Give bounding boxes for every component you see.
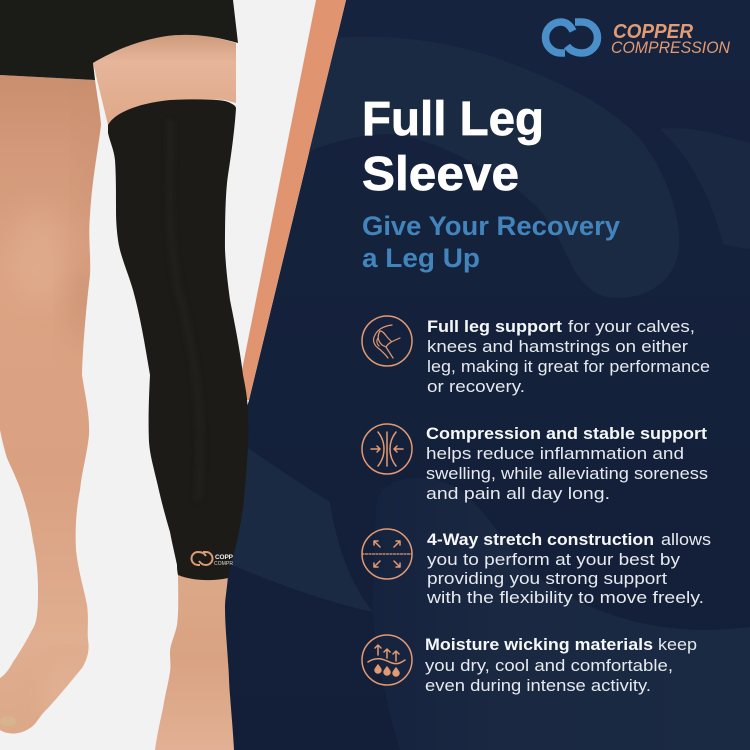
text: 4-way stretch: with the flexibility to move freely. <box>426 589 704 607</box>
swirl background band top <box>300 37 679 298</box>
text: 4-way stretch: allows <box>661 531 711 549</box>
text: moisture wicking <box>425 636 697 695</box>
navy panel <box>200 0 750 750</box>
sleeve seam highlight <box>170 120 200 500</box>
text: 4-way stretch: you to perform at your best by <box>427 551 681 569</box>
text: 4-way stretch: providing you strong support <box>427 570 667 588</box>
sleeve logo <box>192 552 234 565</box>
text: full leg support: leg, making it great for performance <box>427 358 710 376</box>
subtitle: a Leg Up <box>362 243 480 273</box>
text: full leg support <box>427 318 710 396</box>
left leg <box>0 70 110 740</box>
text: full leg support: or recovery. <box>427 378 525 396</box>
sleeve logo text: COPP <box>215 554 234 561</box>
title <box>362 93 544 201</box>
benefit: moisture wicking <box>362 635 697 695</box>
left toenail <box>0 716 16 726</box>
title: Sleeve <box>362 148 519 201</box>
subtitle: Give Your Recovery <box>362 211 620 241</box>
text: 4-way stretch <box>426 531 711 607</box>
text: full leg support: knees and hamstrings on either <box>427 338 689 356</box>
text: moisture wicking: Moisture wicking materials <box>425 636 653 654</box>
icon: knee <box>362 316 412 366</box>
benefit: full leg support <box>362 316 710 396</box>
logo mark <box>546 22 597 53</box>
icon: moisture wicking <box>362 635 412 685</box>
shorts <box>0 0 238 80</box>
swirl background shape lower right <box>440 532 750 750</box>
sleeve logo mark <box>192 552 212 565</box>
logo word compression: COMPRESSION <box>611 38 731 57</box>
swirl background shape upper right <box>660 128 750 249</box>
compression sleeve <box>108 99 248 580</box>
benefit: 4-way stretch <box>362 529 711 607</box>
text: full leg support: for your calves, <box>568 318 695 336</box>
icon: compression arrows <box>362 424 412 474</box>
benefit: compression <box>362 424 708 503</box>
logo word copper: COPPER <box>613 21 694 43</box>
text: compression <box>426 425 708 503</box>
right lower leg and foot <box>155 570 234 750</box>
subtitle <box>362 211 620 273</box>
text: 4-way stretch: 4-Way stretch construction <box>427 531 654 549</box>
text: compression: Compression and stable support <box>426 425 708 443</box>
text: compression: and pain all day long. <box>426 485 610 503</box>
text: moisture wicking: keep <box>658 636 697 654</box>
right thigh <box>93 35 236 125</box>
text: compression: swelling, while alleviating soreness <box>426 465 708 483</box>
sleeve logo subtext: COMPR <box>214 561 233 567</box>
text: compression: helps reduce inflammation and <box>426 445 684 463</box>
brand logo <box>546 21 731 57</box>
copper diagonal stripe <box>236 0 346 400</box>
text: moisture wicking: even during intense activity. <box>425 677 651 695</box>
title: Full Leg <box>362 93 544 146</box>
text: moisture wicking: you dry, cool and comfortable, <box>425 657 673 675</box>
knee shading <box>72 266 90 334</box>
icon: four-way stretch <box>362 529 412 579</box>
text: full leg support: Full leg support <box>427 318 563 336</box>
swirl background band lower left <box>225 448 373 612</box>
photo of legs and shorts <box>0 0 248 750</box>
